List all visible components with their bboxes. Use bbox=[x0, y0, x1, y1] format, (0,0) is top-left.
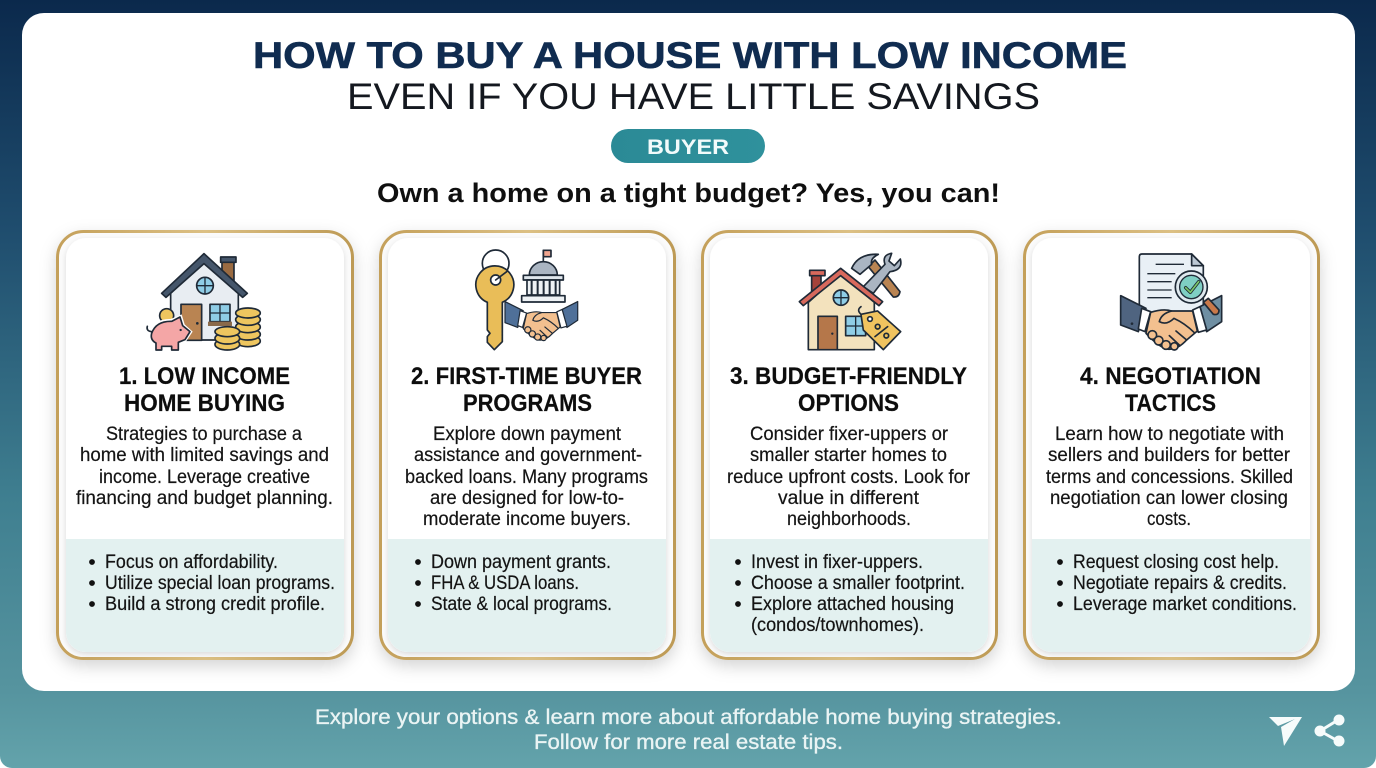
card 2 bullet list bbox=[415, 552, 612, 615]
card 4 heading: 4. NEGOTIATION bbox=[1080, 363, 1261, 390]
card 3 bullet list: Choose a smaller footprint. bbox=[751, 573, 965, 594]
card 3 description: Consider fixer-uppers or bbox=[750, 424, 949, 445]
icon: paper plane bbox=[1269, 717, 1302, 746]
icon: document, magnifier and handshake bbox=[1121, 254, 1222, 350]
card 3 bullet list bbox=[735, 552, 965, 636]
card 4 bullet list: Request closing cost help. bbox=[1073, 552, 1279, 573]
card 3 description: reduce upfront costs. Look for bbox=[727, 467, 971, 488]
card 2 description: moderate income buyers. bbox=[423, 509, 631, 530]
card 3 description: neighborhoods. bbox=[787, 509, 911, 530]
card 1 description: home with limited savings and bbox=[80, 445, 329, 466]
badge: buyer bbox=[611, 129, 765, 163]
tagline: Own a home on a tight budget? Yes, you can! bbox=[377, 178, 1000, 208]
card 4 bullet list bbox=[1057, 552, 1297, 615]
card 3 heading: 3. BUDGET-FRIENDLY bbox=[730, 363, 967, 390]
card 1 description: Strategies to purchase a bbox=[106, 424, 302, 445]
footer call to action: Explore your options & learn more about affordable home buying strategies. bbox=[315, 706, 1062, 729]
card 2 heading: 2. FIRST-TIME BUYER bbox=[411, 363, 642, 390]
card 2 bullet list: Down payment grants. bbox=[431, 552, 611, 573]
panel: card 1 low income home buying bbox=[58, 232, 352, 658]
card 3 heading: OPTIONS bbox=[798, 390, 899, 417]
card 1 bullet list: Utilize special loan programs. bbox=[105, 573, 335, 594]
card 4 heading bbox=[1080, 363, 1261, 417]
card 3 bullet list: Explore attached housing bbox=[751, 594, 954, 615]
title: EVEN IF YOU HAVE LITTLE SAVINGS bbox=[347, 76, 1040, 117]
card 4 description bbox=[1046, 424, 1293, 530]
panel: card 3 budget-friendly options bbox=[702, 232, 996, 658]
badge: buyer: BUYER bbox=[647, 136, 729, 159]
card 3 bullet list: (condos/townhomes). bbox=[751, 615, 924, 636]
card 1 description: income. Leverage creative bbox=[99, 467, 310, 488]
card 3 bullet list: Invest in fixer-uppers. bbox=[751, 552, 923, 573]
card 1 bullet list bbox=[89, 552, 335, 615]
card 2 heading: PROGRAMS bbox=[463, 390, 592, 417]
card 4 description: Learn how to negotiate with bbox=[1055, 424, 1284, 445]
card 4 heading: TACTICS bbox=[1125, 390, 1216, 417]
footer call to action bbox=[315, 706, 1062, 754]
icon: house with piggy bank and coins bbox=[147, 254, 260, 352]
card 2 description: assistance and government- bbox=[414, 445, 642, 466]
card 1 description bbox=[76, 424, 333, 509]
title: HOW TO BUY A HOUSE WITH LOW INCOME bbox=[253, 35, 1127, 76]
card 1 heading: 1. LOW INCOME bbox=[119, 363, 290, 390]
card 2 description: are designed for low-to- bbox=[430, 488, 624, 509]
card 3 description bbox=[727, 424, 971, 530]
card 1 bullet list: Build a strong credit profile. bbox=[105, 594, 325, 615]
card 2 heading bbox=[411, 363, 642, 417]
card 1 description: financing and budget planning. bbox=[76, 488, 333, 509]
card 2 description: Explore down payment bbox=[433, 424, 622, 445]
card 3 description: value in different bbox=[778, 488, 920, 509]
card 4 description: costs. bbox=[1147, 509, 1191, 530]
icon: share bbox=[1314, 714, 1344, 746]
card 1 bullet list: Focus on affordability. bbox=[105, 552, 278, 573]
title bbox=[253, 35, 1127, 117]
card 4 description: sellers and builders for better bbox=[1048, 445, 1291, 466]
panel: card 2 first-time buyer programs bbox=[380, 232, 674, 658]
card 4 bullet list: Leverage market conditions. bbox=[1073, 594, 1297, 615]
card 2 bullet list: FHA & USDA loans. bbox=[431, 573, 579, 594]
card 4 description: negotiation can lower closing bbox=[1050, 488, 1288, 509]
panel: card 4 negotiation tactics bbox=[1024, 232, 1318, 658]
card 2 bullet list: State & local programs. bbox=[431, 594, 612, 615]
card 2 description: backed loans. Many programs bbox=[405, 467, 648, 488]
card 4 description: terms and concessions. Skilled bbox=[1046, 467, 1293, 488]
icon: house with tools and price tag bbox=[799, 253, 901, 350]
card 1 heading: HOME BUYING bbox=[124, 390, 285, 417]
card 3 description: smaller starter homes to bbox=[750, 445, 947, 466]
card 1 heading bbox=[119, 363, 290, 417]
card 2 description bbox=[405, 424, 648, 530]
card 4 bullet list: Negotiate repairs & credits. bbox=[1073, 573, 1287, 594]
icon: key, government building and handshake bbox=[476, 250, 578, 350]
card 3 heading bbox=[730, 363, 967, 417]
footer call to action: Follow for more real estate tips. bbox=[534, 731, 843, 754]
